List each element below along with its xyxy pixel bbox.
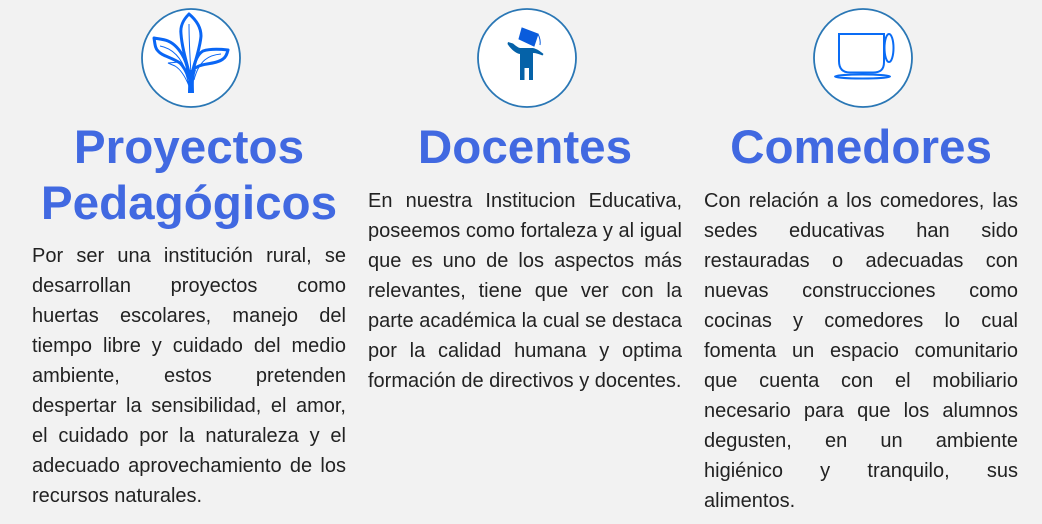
text block: Por ser una institución rural, se desarrollan proyectos como huertas escolares, manejo del tiempo libre y cuidado del medio ambiente, estos pretenden despertar la sensibilidad, el amor, el cuidado por la naturaleza y el adecuado aprovechamiento de los recursos naturales.	[32, 245, 346, 507]
text block: Con relación a los comedores, las sedes educativas han sido restauradas o adecuadas con nuevas construcciones como cocinas y comedores lo cual fomenta un espacio comunitario que cuenta con el mobiliario necesario para que los alumnos degusten, en un ambiente higiénico y tranquilo, sus alimentos.	[704, 190, 1018, 512]
heading: Proyectos Pedagógicos	[41, 121, 337, 230]
panel: Docentes	[368, 8, 682, 392]
icon: plant	[141, 8, 241, 108]
panel: Proyectos Pedagógicos	[32, 8, 346, 507]
icon: cup	[813, 8, 913, 108]
text block: En nuestra Institucion Educativa, poseemos como fortaleza y al igual que es uno de los aspectos más relevantes, tiene que ver con la parte académica la cual se destaca por la calidad humana y optima formación de directivos y docentes.	[368, 190, 682, 392]
heading: Comedores	[730, 121, 992, 174]
heading: Docentes	[418, 121, 632, 174]
panel: Comedores	[704, 8, 1018, 512]
icon: graduate	[477, 8, 577, 108]
